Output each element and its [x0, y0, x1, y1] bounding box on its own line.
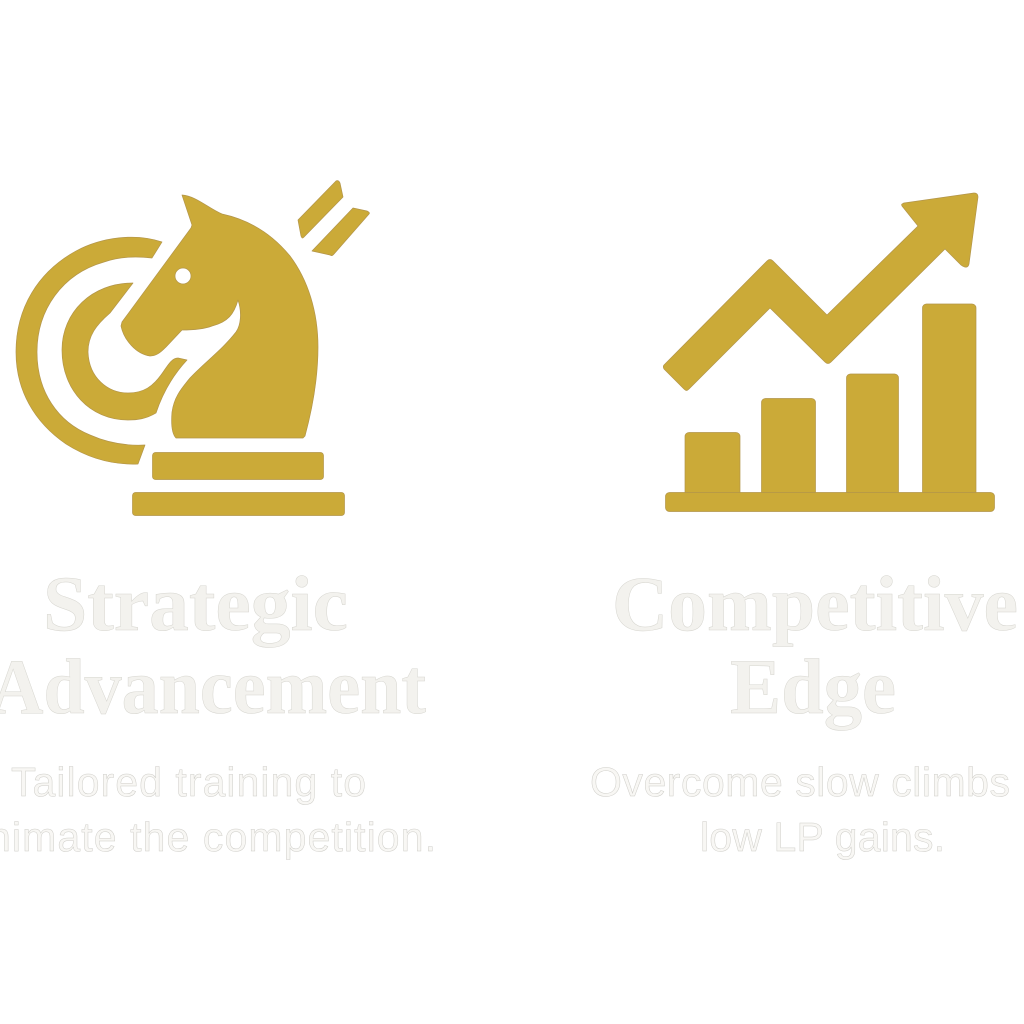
heading: competitive edge: Competitive — [612, 560, 1018, 647]
icon: rising bar chart with arrow — [663, 193, 994, 512]
knight base bottom — [132, 492, 344, 516]
bar chart columns and baseline — [666, 304, 994, 512]
heading: competitive edge — [612, 560, 1018, 730]
target outer ring — [16, 237, 162, 464]
text block: competitive description: low LP gains. — [700, 814, 945, 860]
text block: strategic description — [0, 759, 436, 860]
knight base top — [152, 452, 324, 480]
rising arrow — [663, 193, 978, 390]
panel: competitive edge — [590, 193, 1018, 860]
arrow fletching lower — [312, 208, 369, 256]
heading: strategic advancement: Advancement — [0, 643, 426, 730]
knight head — [121, 195, 318, 438]
target inner ring — [62, 283, 187, 420]
text block: competitive description: Overcome slow climbs — [590, 759, 1010, 805]
icon: chess knight with target and arrow — [16, 181, 369, 516]
text block: competitive description — [590, 759, 1010, 860]
panel: strategic advancement — [0, 181, 436, 860]
heading: strategic advancement: Strategic — [43, 560, 348, 647]
arrow fletching upper — [298, 181, 343, 238]
text block: strategic description: Tailored training to — [11, 759, 366, 805]
heading: strategic advancement — [0, 560, 426, 730]
heading: competitive edge: Edge — [730, 643, 896, 730]
text block: strategic description: nimate the competition. — [0, 814, 436, 860]
